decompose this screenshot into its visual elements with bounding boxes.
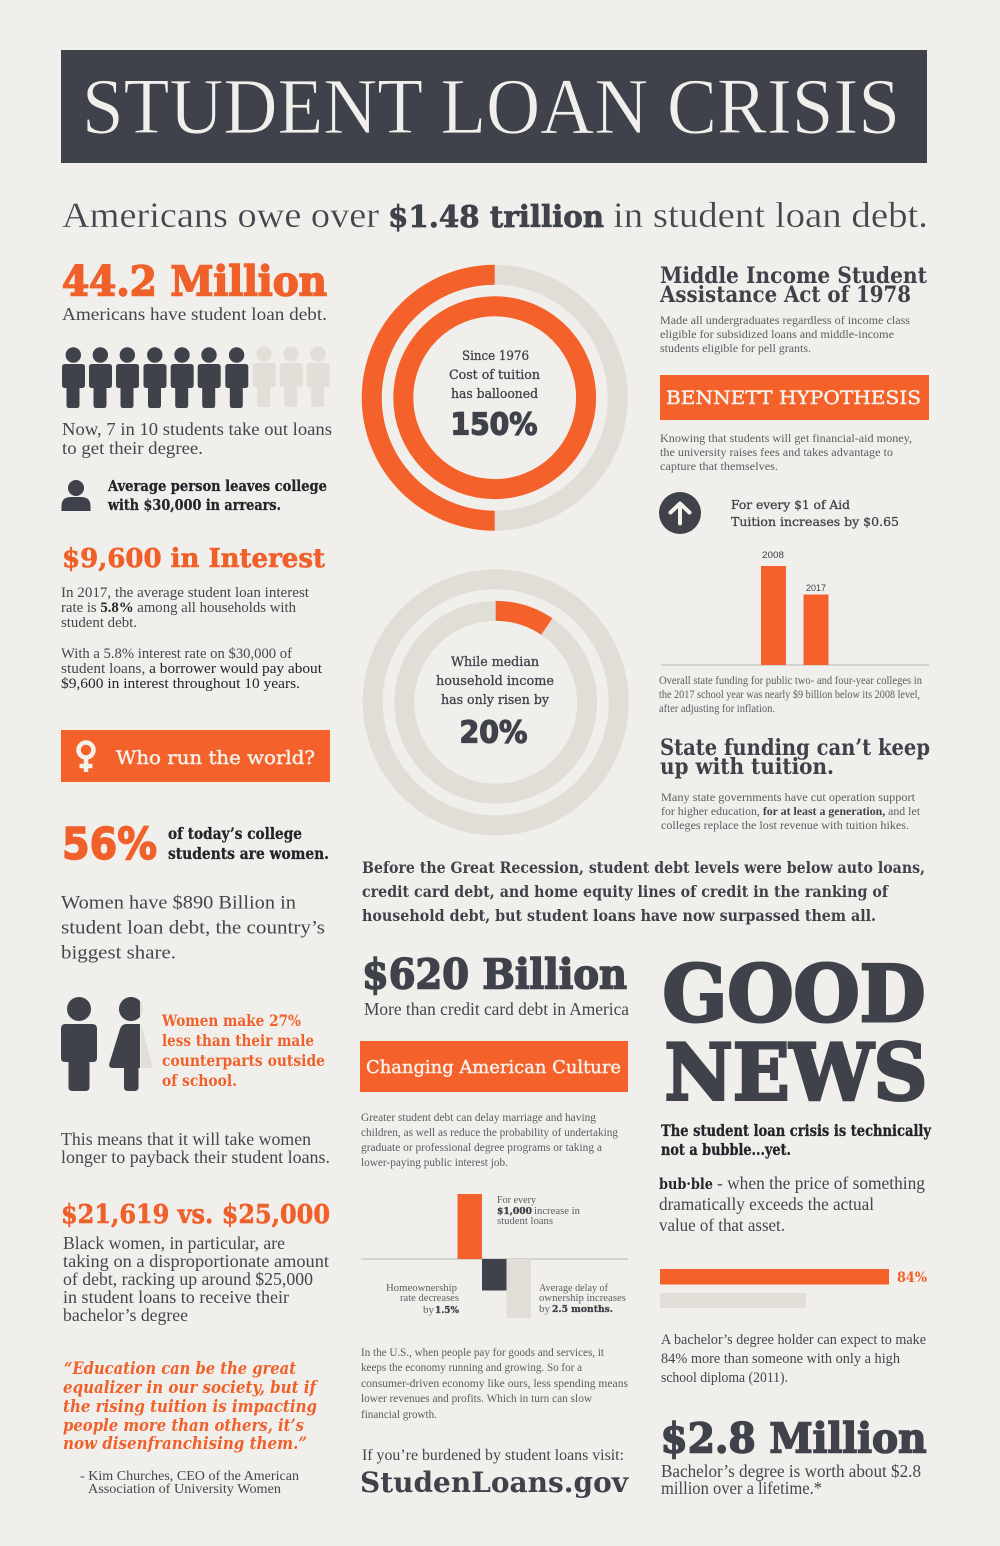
quote: equalizer in our society, but if (63, 1378, 318, 1398)
heading: middle income act: Assistance Act of 1978 (659, 282, 911, 308)
text: average arrears: Average person leaves college (107, 477, 327, 495)
donut chart: income 20% (373, 579, 619, 825)
label: increase in loans: $1,000 (497, 1206, 532, 1217)
text: bachelor earnings: 84% more than someone with only a high (661, 1351, 901, 1367)
banner: bennett hypothesis: BENNETT HYPOTHESIS (666, 388, 921, 409)
stat: $620 billion: $620 Billion (362, 950, 627, 998)
subtitle (62, 195, 928, 235)
text: aid and tuition: For every $1 of Aid (731, 497, 850, 512)
icon row: 7 in 10 students (62, 346, 330, 408)
donut chart: tuition 150%: 150% (450, 408, 538, 442)
text: bennett hypothesis (660, 431, 912, 473)
label: homeownership: Homeownership (386, 1283, 457, 1294)
text: aid and tuition (731, 497, 899, 529)
call to action: StudenLoans.gov (360, 1466, 629, 1499)
text: bachelor earnings: A bachelor’s degree holder can expect to make (661, 1332, 926, 1348)
text: culture: children, as well as reduce the probability of undertaking (361, 1127, 618, 1139)
icon: man and woman (61, 997, 153, 1091)
text: middle income act: students eligible for pell grants. (660, 341, 811, 355)
text: interest paragraphs: student debt. (61, 615, 137, 631)
heading: state funding: State funding can’t keep (660, 735, 930, 761)
text: consumer economy (361, 1347, 629, 1421)
stat: 44.2 million: 44.2 Million (62, 258, 327, 306)
text: women earn less: counterparts outside (162, 1051, 325, 1070)
text: interest paragraphs (61, 585, 322, 692)
stat: 56%: students are women. (168, 844, 329, 863)
icon: up arrow (659, 492, 701, 534)
text: black women debt: Black women, in particular, are (63, 1233, 285, 1253)
heading: good news: NEWS (664, 1028, 928, 1119)
text: longer payback: This means that it will take women (61, 1129, 311, 1149)
text: state funding note: after adjusting for inflation. (659, 703, 775, 715)
icon: person (62, 480, 90, 511)
text: black women debt: in student loans to receive their (63, 1287, 289, 1307)
subtitle: Americans owe over (62, 195, 379, 235)
stat: 56%: 56% (62, 819, 157, 870)
banner: who run the world: Who run the world? (116, 747, 315, 769)
label: homeownership: by (423, 1305, 435, 1316)
text: bubble definition (659, 1173, 925, 1235)
text: bachelor earnings (661, 1332, 926, 1386)
text: bennett hypothesis: capture that themselves. (660, 459, 778, 473)
label: increase in loans: student loans (497, 1216, 553, 1227)
donut chart: tuition 150%: Since 1976 (462, 349, 529, 364)
text: interest paragraphs: With a 5.8% interest rate on $30,000 of (61, 646, 292, 662)
heading: state funding (660, 735, 930, 780)
text: women debt share: Women have $890 Billion in (61, 892, 297, 914)
quote: now disenfranchising them.” (63, 1434, 307, 1454)
text: bubble definition: dramatically exceeds the actual (659, 1194, 874, 1214)
quote attribution: Association of University Women (88, 1482, 281, 1497)
text: 7 in 10 students: to get their degree. (62, 438, 203, 458)
stat: $2.8 million: $2.8 Million (660, 1414, 926, 1462)
heading: good news (662, 949, 928, 1119)
label: increase in loans: increase in (534, 1206, 581, 1217)
stat: 56% (62, 819, 329, 870)
text: women earn less: Women make 27% (161, 1011, 301, 1030)
text: great recession (362, 858, 925, 925)
text: consumer economy: In the U.S., when people pay for goods and services, it (361, 1347, 605, 1359)
label: increase in loans (497, 1195, 581, 1227)
bar chart: state funding: 2008 (762, 550, 784, 561)
text: state funding (661, 790, 921, 832)
text: black women debt: taking on a disproportionate amount (63, 1251, 329, 1271)
label: homeownership (386, 1283, 459, 1316)
text: aid and tuition: Tuition increases by $0.65 (731, 514, 899, 529)
text: interest paragraphs: student loans, a borrower would pay about (61, 661, 322, 677)
text: bubble definition: - when the price of something (717, 1173, 925, 1193)
label: ownership delay: by (539, 1304, 551, 1315)
heading: $9,600 in interest: $9,600 in Interest (62, 543, 326, 574)
banner: changing american culture: Changing American Culture (366, 1057, 621, 1078)
text: middle income act: eligible for subsidized loans and middle-income (660, 327, 894, 341)
text: middle income act (660, 313, 910, 355)
text: consumer economy: financial growth. (361, 1409, 437, 1421)
text: state funding note: Overall state funding for public two- and four-year colleges in (659, 675, 922, 687)
banner: bennett hypothesis (660, 375, 929, 420)
heading: $21,619 vs. $25,000: $21,619 vs. $25,000 (61, 1199, 330, 1230)
donut chart: income 20%: While median (451, 655, 540, 670)
stat: 44.2 million: Americans have student loan debt. (62, 304, 327, 324)
bar chart: degree earnings: 84% (897, 1270, 927, 1286)
text: women debt share: biggest share. (61, 942, 176, 964)
banner: who run the world (61, 730, 330, 782)
label: homeownership: rate decreases (400, 1293, 459, 1304)
text: culture (361, 1112, 618, 1169)
text: state funding note: the 2017 school year was nearly $9 billion below its 2008 level, (659, 688, 920, 701)
text: women debt share: student loan debt, the country’s (61, 918, 325, 938)
text: black women debt: of debt, racking up around $25,000 (63, 1269, 313, 1289)
donut chart: tuition 150% (372, 275, 618, 521)
text: bubble definition: value of that asset. (659, 1215, 785, 1235)
heading: good news: GOOD (662, 949, 926, 1040)
text: culture: lower-paying public interest job. (361, 1157, 508, 1169)
label: ownership delay (539, 1283, 626, 1315)
text: 7 in 10 students (62, 419, 332, 458)
stat: $2.8 million: Bachelor’s degree is worth about $2.8 (661, 1461, 921, 1481)
text: great recession: household debt, but student loans have now surpassed them all. (362, 906, 876, 925)
label: ownership delay: ownership increases (539, 1293, 626, 1304)
text: consumer economy: consumer-driven economy like ours, less spending means (361, 1378, 629, 1390)
quote: “Education can be the great (64, 1359, 296, 1379)
bar chart: state funding: 2017 (806, 583, 826, 594)
text: bennett hypothesis: the university raises fees and takes advantage to (660, 445, 893, 459)
text: black women debt (63, 1233, 329, 1325)
text: state funding: Many state governments have cut operation support (661, 790, 916, 804)
text: consumer economy: lower revenues and profits. Which in turn can slow (361, 1393, 593, 1405)
text: bennett hypothesis: Knowing that students will get financial-aid money, (660, 431, 912, 445)
text: middle income act: Made all undergraduates regardless of income class (660, 313, 910, 327)
text: great recession: credit card debt, and home equity lines of credit in the ranking of (362, 882, 889, 901)
text: 7 in 10 students: Now, 7 in 10 students take out loans (62, 419, 332, 439)
donut chart: income 20%: household income (436, 674, 554, 689)
text: interest paragraphs: In 2017, the average student loan interest (61, 585, 309, 601)
title banner: STUDENT LOAN CRISIS (82, 64, 900, 151)
icon: female symbol (78, 742, 94, 772)
text: great recession: Before the Great Recession, student debt levels were below auto loans, (362, 858, 925, 877)
quote: people more than others, it’s (63, 1416, 304, 1436)
subtitle: in student loan debt. (613, 195, 928, 235)
text: women earn less (161, 1011, 325, 1090)
quote (63, 1359, 318, 1454)
stat: 44.2 million (62, 258, 327, 324)
stat: $620 billion (362, 950, 629, 1019)
text: black women debt: bachelor’s degree (63, 1305, 188, 1325)
stat: $2.8 million (660, 1414, 926, 1498)
bar chart: degree earnings (660, 1269, 927, 1308)
label: ownership delay: Average delay of (539, 1283, 608, 1294)
text: women earn less: less than their male (162, 1031, 314, 1050)
text: interest paragraphs: rate is 5.8% among all households with (61, 600, 297, 616)
stat: $620 billion: More than credit card debt in America (364, 999, 629, 1019)
call to action: If you’re burdened by student loans visit: (362, 1447, 624, 1464)
subtitle: $1.48 trillion (388, 200, 604, 235)
text: women earn less: of school. (162, 1071, 237, 1090)
text: state funding: colleges replace the lost revenue with tuition hikes. (661, 818, 909, 832)
donut chart: tuition 150%: has ballooned (451, 387, 538, 402)
text: culture: graduate or professional degree programs or taking a (361, 1142, 602, 1154)
bar chart: state funding (661, 550, 929, 666)
label: increase in loans: For every (497, 1195, 537, 1206)
text: not a bubble: not a bubble...yet. (661, 1140, 791, 1159)
heading: middle income act (659, 263, 928, 308)
text: average arrears: with $30,000 in arrears. (107, 496, 281, 514)
stat: 56%: of today’s college (168, 824, 302, 843)
donut chart: income 20%: 20% (460, 716, 528, 750)
quote attribution: - Kim Churches, CEO of the American (80, 1469, 299, 1484)
text: state funding: for higher education, for at least a generation, and let (661, 804, 921, 818)
text: bachelor earnings: school diploma (2011). (661, 1370, 788, 1386)
text: average arrears (107, 477, 327, 514)
call to action (360, 1447, 629, 1499)
text: consumer economy: keeps the economy running and growing. So for a (361, 1362, 582, 1374)
text: not a bubble: The student loan crisis is technically (661, 1121, 932, 1140)
bar chart: loan impact (361, 1194, 628, 1318)
donut chart: tuition 150%: Cost of tuition (449, 368, 541, 383)
text: longer payback (61, 1129, 330, 1167)
label: homeownership: 1.5% (435, 1305, 459, 1316)
quote: the rising tuition is impacting (63, 1397, 317, 1417)
text: interest paragraphs: $9,600 in interest throughout 10 years. (61, 676, 300, 692)
banner: changing american culture (360, 1041, 628, 1092)
text: women debt share (61, 892, 325, 964)
heading: state funding: up with tuition. (660, 754, 834, 780)
heading: middle income act: Middle Income Student (660, 263, 928, 289)
stat: $2.8 million: million over a lifetime.* (661, 1478, 822, 1498)
text: culture: Greater student debt can delay marriage and having (361, 1112, 596, 1124)
label: ownership delay: 2.5 months. (552, 1304, 613, 1315)
text: not a bubble (661, 1121, 932, 1159)
text: bubble definition: bub·ble (659, 1175, 713, 1193)
text: state funding note (659, 675, 922, 715)
donut chart: income 20%: has only risen by (441, 693, 550, 708)
quote attribution (80, 1469, 299, 1497)
text: longer payback: longer to payback their student loans. (61, 1147, 330, 1167)
